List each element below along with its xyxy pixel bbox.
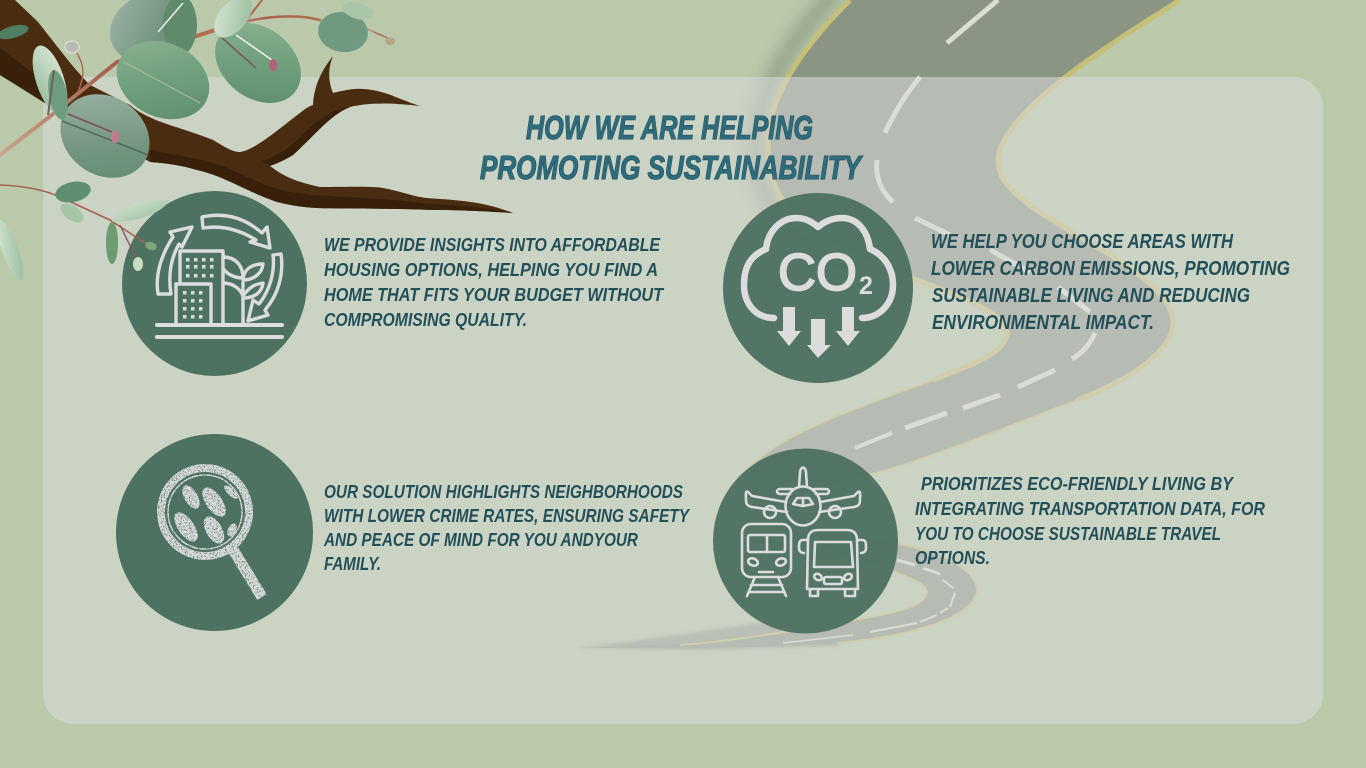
leaf [26,41,74,121]
train [742,524,791,596]
text: lower crime: AND PEACE OF MIND FOR YOU ANDYOUR [323,529,639,550]
icon: buildings with recycling arrows [122,191,307,376]
text: transportation: INTEGRATING TRANSPORTATION DATA, FOR [915,498,1266,519]
icon: plane, train and bus [713,448,898,634]
text: lower carbon [931,231,1290,334]
branch [0,0,513,213]
eucalyptus stems [0,0,392,155]
icon: CO2 cloud: 2 [859,272,873,300]
text: affordable housing: COMPROMISING QUALITY. [324,309,527,330]
text: lower crime: OUR SOLUTION HIGHLIGHTS NEIGHBORHOODS [324,481,684,502]
item: transportation [713,448,1266,634]
title: PROMOTING SUSTAINABILITY [480,149,863,186]
leaf [207,0,259,44]
text: affordable housing: HOUSING OPTIONS, HELPING YOU FIND A [324,259,658,280]
small leaf [0,22,30,42]
leaf [104,26,222,134]
text: affordable housing: WE PROVIDE INSIGHTS INTO AFFORDABLE [324,234,661,255]
icon: CO2 cloud [723,193,913,383]
small bud [65,41,79,53]
winding road illustration [578,0,1180,650]
leaf [315,0,376,55]
text: affordable housing: HOME THAT FITS YOUR BUDGET WITHOUT [324,284,664,305]
title: HOW WE ARE HELPING [526,109,813,146]
leaf [199,6,317,120]
text: lower carbon: LOWER CARBON EMISSIONS, PROMOTING [931,258,1290,280]
leaf [44,77,166,195]
tree branch with eucalyptus leaves [0,0,513,213]
item: lower carbon [723,193,1290,383]
text: transportation [915,473,1266,568]
text: lower carbon: SUSTAINABLE LIVING AND REDUCING [932,285,1250,307]
translucent content panel [43,77,1323,724]
text: transportation: PRIORITIZES ECO-FRIENDLY LIVING BY [921,473,1234,494]
text: lower carbon: WE HELP YOU CHOOSE AREAS WITH [931,231,1233,253]
text: affordable housing [324,234,664,330]
item: affordable housing [122,191,664,376]
text: lower crime [323,481,690,574]
text: transportation: YOU TO CHOOSE SUSTAINABLE TRAVEL [915,523,1221,544]
text: lower crime: WITH LOWER CRIME RATES, ENSURING SAFETY [324,505,690,526]
bus [799,530,866,596]
lower eucalyptus sprig [0,178,170,283]
text: transportation: OPTIONS. [915,547,990,568]
small bud [385,37,395,45]
text: lower crime: FAMILY. [324,553,381,574]
item: lower crime [116,434,690,631]
icon: CO2 cloud: CO [778,244,857,302]
icon: magnifier with footprints [116,434,313,631]
plane [746,468,860,526]
text: lower carbon: ENVIRONMENTAL IMPACT. [932,312,1154,334]
leaf [98,0,202,76]
title [480,109,863,186]
